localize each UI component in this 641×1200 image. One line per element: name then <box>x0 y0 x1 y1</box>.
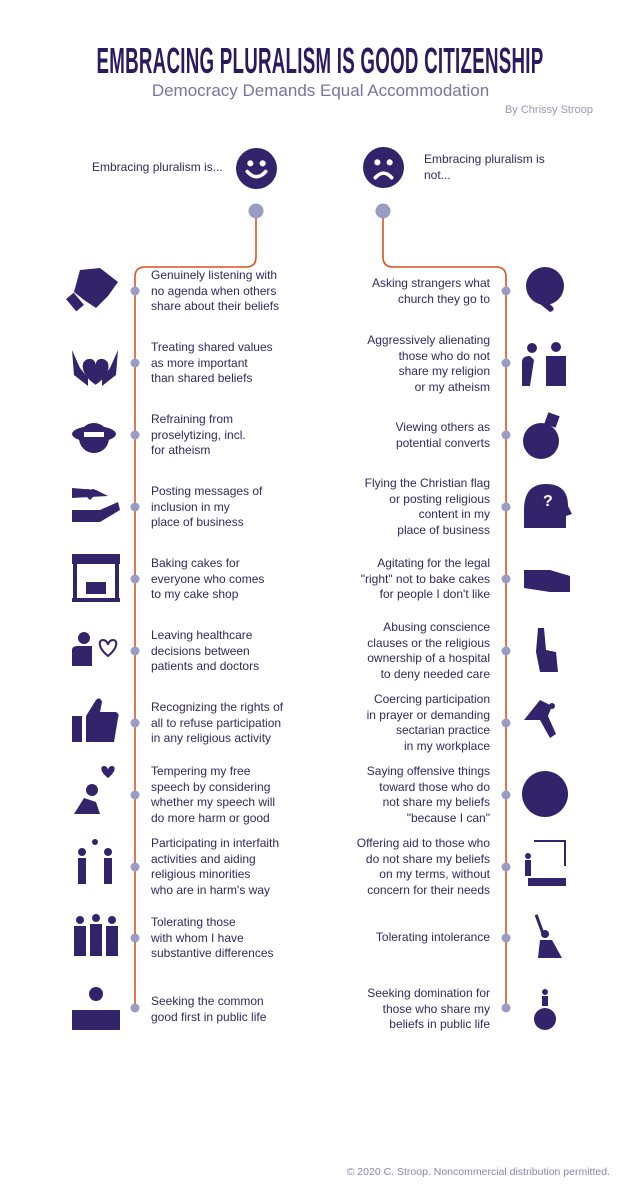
item: offensive: Saying offensive things <box>367 764 490 778</box>
item: speech: do more harm or good <box>151 810 270 824</box>
item: aid: on my terms, without <box>379 867 490 881</box>
item: strangers <box>372 276 490 306</box>
item: common good: good first in public life <box>151 1010 266 1024</box>
item: refraining: Refraining from <box>151 412 233 426</box>
item: inclusion: place of business <box>151 515 244 529</box>
item: tolerating: with whom I have <box>151 930 244 944</box>
item: interfaith <box>151 836 279 896</box>
item: rights: in any religious activity <box>151 731 271 745</box>
item: tolerating: Tolerating those <box>151 915 236 929</box>
item: refraining: for atheism <box>151 443 210 457</box>
item: coercing: Coercing participation <box>374 692 490 706</box>
right header text: not... <box>424 168 451 182</box>
item: shared values: than shared beliefs <box>151 371 252 385</box>
left icons <box>66 268 120 1030</box>
item: domination: those who share my <box>383 1002 490 1016</box>
byline: By Chrissy Stroop <box>505 104 593 116</box>
icon: smiley <box>236 148 277 189</box>
title: EMBRACING PLURALISM IS GOOD CITIZENSHIP <box>97 40 543 81</box>
item: interfaith: Participating in interfaith <box>151 836 279 850</box>
item: refraining: proselytizing, incl. <box>151 428 246 442</box>
item: healthcare: Leaving healthcare <box>151 628 252 642</box>
item: legal right: Agitating for the legal <box>377 556 490 570</box>
item: shared values <box>151 340 273 385</box>
item: common good <box>151 994 266 1024</box>
item: listening <box>151 268 279 313</box>
icon: handshake <box>66 268 118 311</box>
item: legal right: for people I don't like <box>380 587 490 601</box>
left header text: Embracing pluralism is... <box>92 160 223 174</box>
icon: sneezing people <box>522 342 566 386</box>
item: aid <box>357 836 490 896</box>
icon: head question <box>524 484 572 528</box>
item: inclusion <box>151 484 262 529</box>
item: conscience: to deny needed care <box>381 666 490 680</box>
item: cakes: everyone who comes <box>151 572 264 586</box>
item: aid: Offering aid to those who <box>357 836 490 850</box>
icon: angry face <box>522 771 568 817</box>
right items <box>357 276 490 1031</box>
item: speech: whether my speech will <box>151 795 275 809</box>
item: refraining <box>151 412 246 457</box>
icon: globe crowd <box>72 987 120 1030</box>
icon: person with heart <box>74 766 115 814</box>
item: domination <box>367 986 490 1031</box>
item: interfaith: who are in harm's way <box>151 882 270 896</box>
item: flag: content in my <box>419 507 490 521</box>
item: offensive: "because I can" <box>407 810 490 824</box>
icon: coercing <box>524 700 556 738</box>
item: speech: Tempering my free <box>151 764 250 778</box>
item: conscience <box>367 620 490 680</box>
item: legal right <box>361 556 490 601</box>
item: converts: potential converts <box>396 436 490 450</box>
item: healthcare: decisions between <box>151 644 250 658</box>
icon: hand with hearts <box>72 488 120 522</box>
icon: heart hands <box>72 350 118 386</box>
item: flag <box>365 476 490 536</box>
icon: fist <box>524 570 570 592</box>
item: cakes <box>151 556 264 601</box>
item: rights: all to refuse participation <box>151 716 281 730</box>
item: conscience: clauses or the religious <box>367 636 490 650</box>
item: coercing: in my workplace <box>404 738 490 752</box>
item: cakes: to my cake shop <box>151 587 238 601</box>
item: shared values: Treating shared values <box>151 340 273 354</box>
item: inclusion: inclusion in my <box>151 500 230 514</box>
item: flag: place of business <box>397 522 490 536</box>
item: alienating: share my religion <box>399 364 490 378</box>
icon: cake shop <box>72 554 120 602</box>
item: shared values: as more important <box>151 356 248 370</box>
icon: three people <box>74 914 118 956</box>
icon: healthcare <box>72 632 116 666</box>
footer: © 2020 C. Stroop. Noncommercial distribution permitted. <box>347 1166 610 1178</box>
item: speech <box>151 764 275 824</box>
left items <box>151 268 284 1024</box>
item: rights: Recognizing the rights of <box>151 700 283 714</box>
item: alienating: those who do not <box>399 348 490 362</box>
item: flag: or posting religious <box>389 492 490 506</box>
item: converts <box>396 420 490 450</box>
item: offensive: not share my beliefs <box>383 795 490 809</box>
item: coercing: in prayer or demanding <box>367 708 490 722</box>
icon: person on globe <box>534 989 556 1030</box>
item: listening: no agenda when others <box>151 284 276 298</box>
item: inclusion: Posting messages of <box>151 484 262 498</box>
item: healthcare <box>151 628 259 673</box>
item: alienating <box>367 333 490 394</box>
icon: head question: ? <box>543 493 553 510</box>
item: flag: Flying the Christian flag <box>365 476 490 490</box>
icon: interfaith <box>78 839 112 884</box>
right header text <box>424 152 545 182</box>
item: domination: Seeking domination for <box>367 986 490 1000</box>
item: listening: Genuinely listening with <box>151 268 277 282</box>
item: alienating: or my atheism <box>415 380 490 394</box>
item: common good: Seeking the common <box>151 994 264 1008</box>
item: domination: beliefs in public life <box>389 1017 490 1031</box>
icon: frowny <box>363 147 404 188</box>
item: tolerating <box>151 915 274 960</box>
item: legal right: "right" not to bake cakes <box>361 572 490 586</box>
item: offensive: toward those who do <box>379 780 490 794</box>
item: interfaith: religious minorities <box>151 867 250 881</box>
icon: torch person <box>535 914 562 958</box>
item: converts: Viewing others as <box>396 420 490 434</box>
subtitle: Democracy Demands Equal Accommodation <box>152 81 489 100</box>
icon: thinking face <box>526 267 564 312</box>
item: aid: concern for their needs <box>367 882 490 896</box>
icon: hand stop <box>536 628 558 672</box>
icon: presenter <box>525 840 566 886</box>
item: alienating: Aggressively alienating <box>367 333 490 347</box>
item: rights <box>151 700 284 745</box>
item: coercing: sectarian practice <box>396 723 490 737</box>
item: listening: share about their beliefs <box>151 299 279 313</box>
right header text: Embracing pluralism is <box>424 152 545 166</box>
icon: thumbs up <box>72 698 119 742</box>
item: conscience: ownership of a hospital <box>367 651 490 665</box>
item: aid: do not share my beliefs <box>366 852 490 866</box>
item: offensive <box>367 764 490 824</box>
item: coercing <box>367 692 490 752</box>
item: healthcare: patients and doctors <box>151 659 259 673</box>
item: conscience: Abusing conscience <box>383 620 490 634</box>
item: cakes: Baking cakes for <box>151 556 240 570</box>
icon: face with hat <box>72 423 116 453</box>
item: tolerating: substantive differences <box>151 946 274 960</box>
item: speech: speech by considering <box>151 780 270 794</box>
item: intolerance: Tolerating intolerance <box>376 930 490 944</box>
item: interfaith: activities and aiding <box>151 852 256 866</box>
item: strangers: church they go to <box>398 292 490 306</box>
icon: face with hat <box>523 412 560 459</box>
item: strangers: Asking strangers what <box>372 276 490 290</box>
